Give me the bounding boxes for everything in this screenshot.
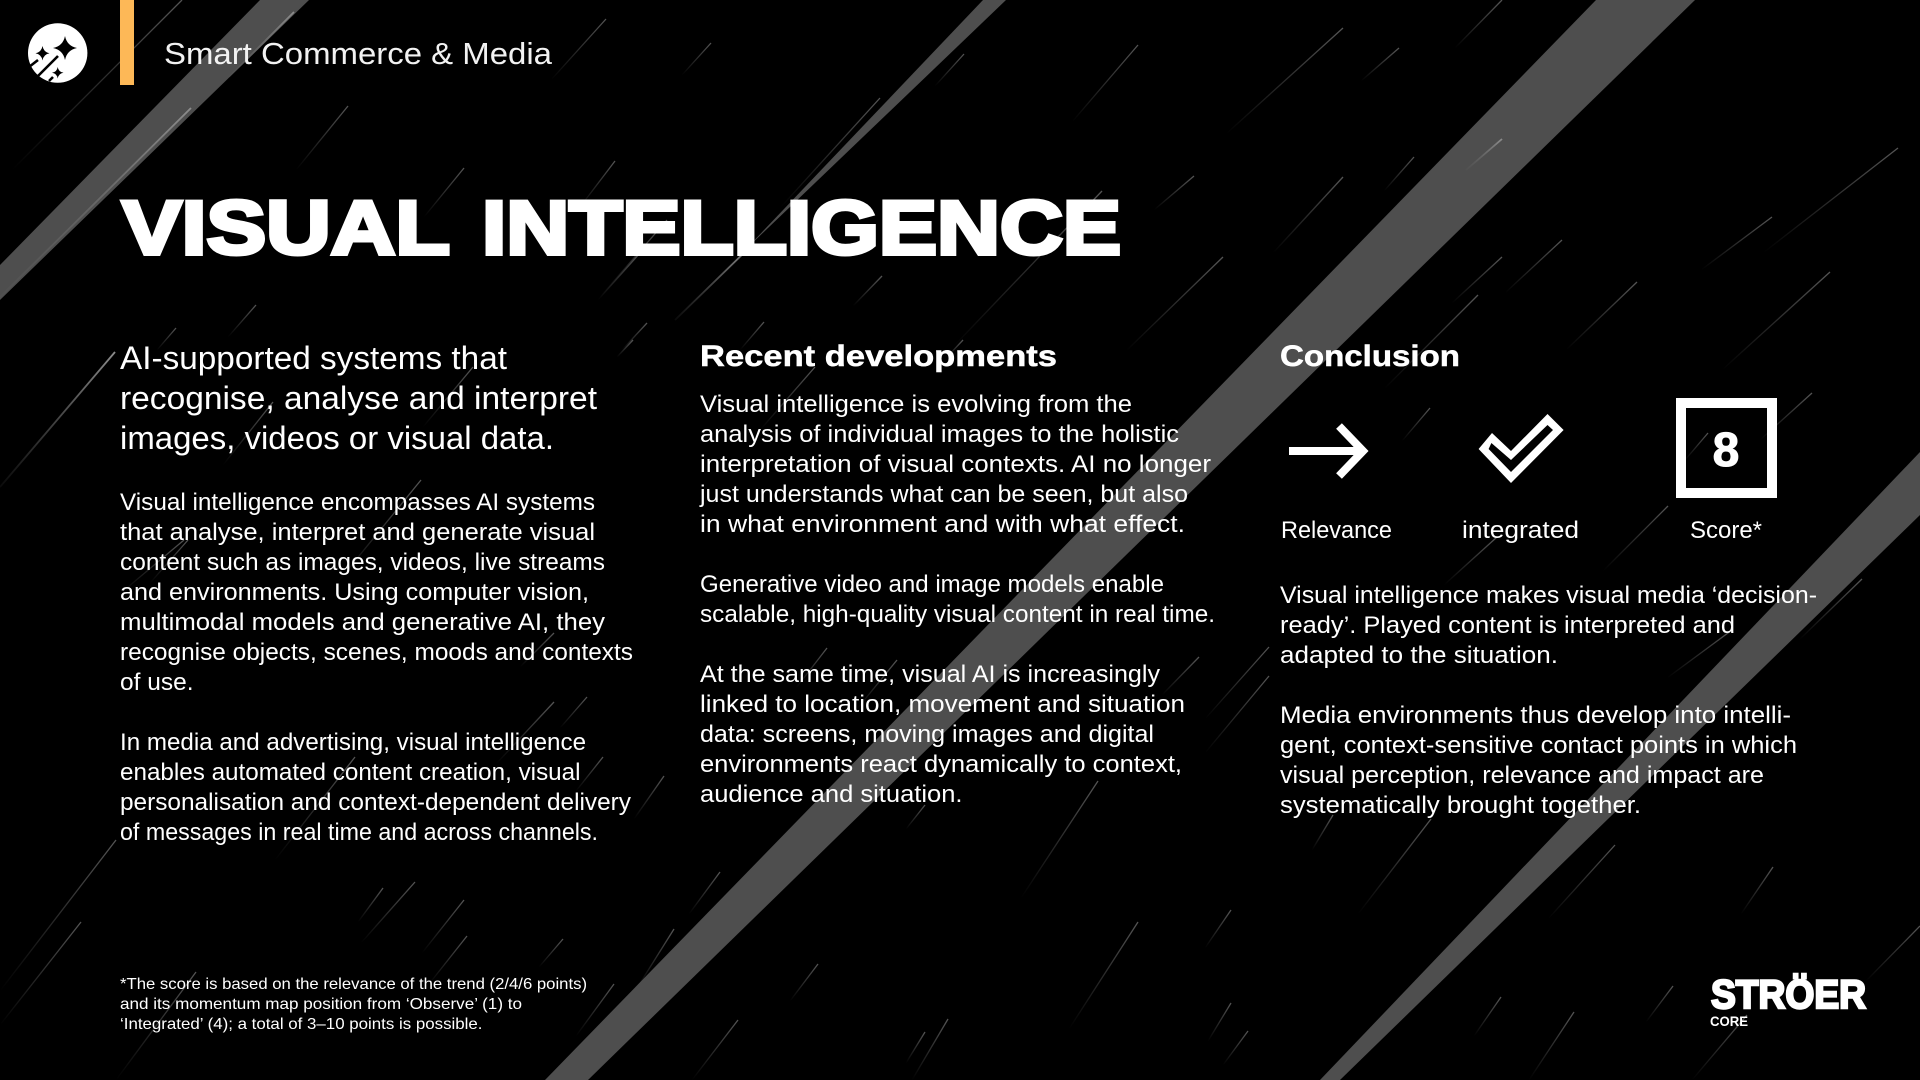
- text block: linked to location: environments react dynamically to context,: [700, 751, 1182, 778]
- text block: media and advertising: of messages in real time and across channels.: [120, 819, 598, 846]
- lead statement: images, videos or visual data.: [120, 420, 554, 456]
- text block: decision-ready: Visual intelligence makes visual media ‘decision-: [1280, 582, 1817, 609]
- label: relevance: Relevance: [1281, 517, 1392, 544]
- text block: decision-ready: adapted to the situation.: [1280, 642, 1558, 669]
- text block: linked to location: At the same time, visual AI is increasingly: [700, 661, 1160, 688]
- text block: generative models: Generative video and image models enable: [700, 571, 1164, 598]
- text block: media environments: gent, context-sensitive contact points in which: [1280, 732, 1797, 759]
- text block: what it is: and environments. Using computer vision,: [120, 579, 589, 606]
- text block: linked to location: data: screens, moving images and digital: [700, 721, 1154, 748]
- text block: evolution: Visual intelligence is evolving from the: [700, 391, 1132, 418]
- label: integrated: integrated: [1462, 517, 1579, 544]
- score value: 8: [1713, 424, 1739, 477]
- lead statement: AI-supported systems that: [120, 340, 507, 376]
- text block: linked to location: audience and situation.: [700, 781, 962, 808]
- footnote: [120, 976, 587, 1033]
- text block: what it is: Visual intelligence encompasses AI systems: [120, 489, 595, 516]
- logo: Ströer Core: STRÖER: [1711, 972, 1866, 1017]
- text block: media environments: Media environments thus develop into intelli-: [1280, 702, 1791, 729]
- icon: integrated check mark: [1479, 414, 1564, 483]
- text block: what it is: of use.: [120, 669, 194, 696]
- lead statement: [120, 340, 597, 456]
- icon: round logo with shooting stars: [28, 23, 87, 83]
- text block: evolution: just understands what can be seen, but also: [699, 481, 1188, 508]
- text block: media and advertising: enables automated content creation, visual: [120, 759, 580, 786]
- text block: what it is: content such as images, videos, live streams: [120, 549, 605, 576]
- text block: evolution: analysis of individual images to the holistic: [700, 421, 1179, 448]
- text block: linked to location: [700, 661, 1185, 808]
- footnote: and its momentum map position from ‘Observe’ (1) to: [120, 996, 522, 1013]
- panel: conclusion column: [1280, 340, 1817, 819]
- text block: generative models: [700, 571, 1215, 628]
- title: VISUAL: [122, 186, 450, 271]
- title: INTELLIGENCE: [482, 186, 1121, 271]
- lead statement: recognise, analyse and interpret: [120, 380, 597, 416]
- icon: relevance arrow: [1289, 426, 1363, 476]
- text block: media environments: [1280, 702, 1797, 819]
- text block: what it is: that analyse, interpret and generate visual: [120, 519, 595, 546]
- label: score: Score*: [1690, 517, 1762, 544]
- heading: recent developments: Recent developments: [700, 340, 1057, 373]
- panel: recent developments column: [699, 340, 1215, 808]
- text block: media and advertising: In media and advertising, visual intelligence: [120, 729, 586, 756]
- text block: what it is: multimodal models and generative AI, they: [120, 609, 605, 636]
- text block: media and advertising: personalisation and context-dependent delivery: [120, 789, 631, 816]
- heading: conclusion: Conclusion: [1280, 340, 1460, 373]
- text block: generative models: scalable, high-quality visual content in real time.: [700, 601, 1215, 628]
- text block: what it is: recognise objects, scenes, moods and contexts: [120, 639, 633, 666]
- text block: decision-ready: ready’. Played content is interpreted and: [1280, 612, 1735, 639]
- text block: evolution: [699, 391, 1211, 538]
- logo: Ströer Core: CORE: [1710, 1013, 1748, 1029]
- text block: media environments: systematically brought together.: [1280, 792, 1641, 819]
- text block: what it is: [120, 489, 633, 696]
- background: brighter streaks: [0, 12, 1502, 487]
- text block: evolution: interpretation of visual contexts. AI no longer: [700, 451, 1211, 478]
- text block: decision-ready: [1280, 582, 1817, 669]
- title: [122, 186, 1121, 271]
- accent bar: orange: [120, 0, 134, 85]
- text block: media and advertising: [120, 729, 631, 846]
- icon: score box: [1681, 403, 1772, 493]
- footnote: ‘Integrated’ (4); a total of 3–10 points is possible.: [120, 1016, 482, 1033]
- text block: evolution: in what environment and with what effect.: [700, 511, 1185, 538]
- panel: definition column: [120, 340, 633, 846]
- text block: media environments: visual perception, relevance and impact are: [1280, 762, 1764, 789]
- footnote: *The score is based on the relevance of the trend (2/4/6 points): [120, 976, 587, 993]
- header: category label: Smart Commerce & Media: [164, 36, 553, 71]
- text block: linked to location: linked to location, movement and situation: [700, 691, 1185, 718]
